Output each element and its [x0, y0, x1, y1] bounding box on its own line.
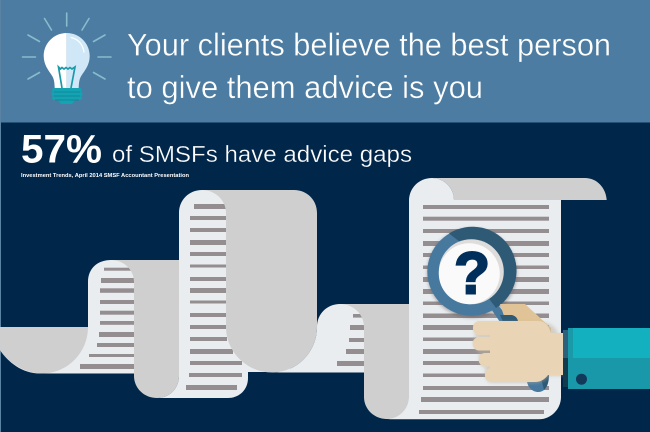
- title: Your clients believe the best person: [127, 26, 611, 62]
- illustration: shirt cuff: [563, 328, 650, 389]
- icon: magnifying glass: [427, 227, 549, 392]
- scroll: main page: [387, 178, 607, 419]
- text lines: first column: [80, 268, 134, 369]
- statistic headline: of SMSFs have advice gaps: [112, 141, 412, 167]
- title: to give them advice is you: [127, 69, 483, 105]
- text lines: second column: [186, 204, 242, 390]
- question mark: ?: [454, 240, 490, 306]
- button: [576, 374, 587, 385]
- text lines: hill: [337, 314, 364, 366]
- title: [127, 26, 611, 105]
- header band: [0, 0, 650, 122]
- scroll: middle section: [157, 190, 317, 398]
- icon: light bulb: [22, 13, 111, 104]
- statistic headline: 57%: [21, 128, 102, 172]
- statistic headline: [21, 128, 412, 172]
- source note: Investment Trends, April 2014 SMSF Accountant Presentation: [21, 173, 190, 179]
- illustration: hand holding magnifier: [473, 304, 563, 383]
- scroll: left section: [0, 260, 179, 398]
- text lines: main page: [419, 205, 549, 414]
- scroll: right hill section: [272, 304, 409, 419]
